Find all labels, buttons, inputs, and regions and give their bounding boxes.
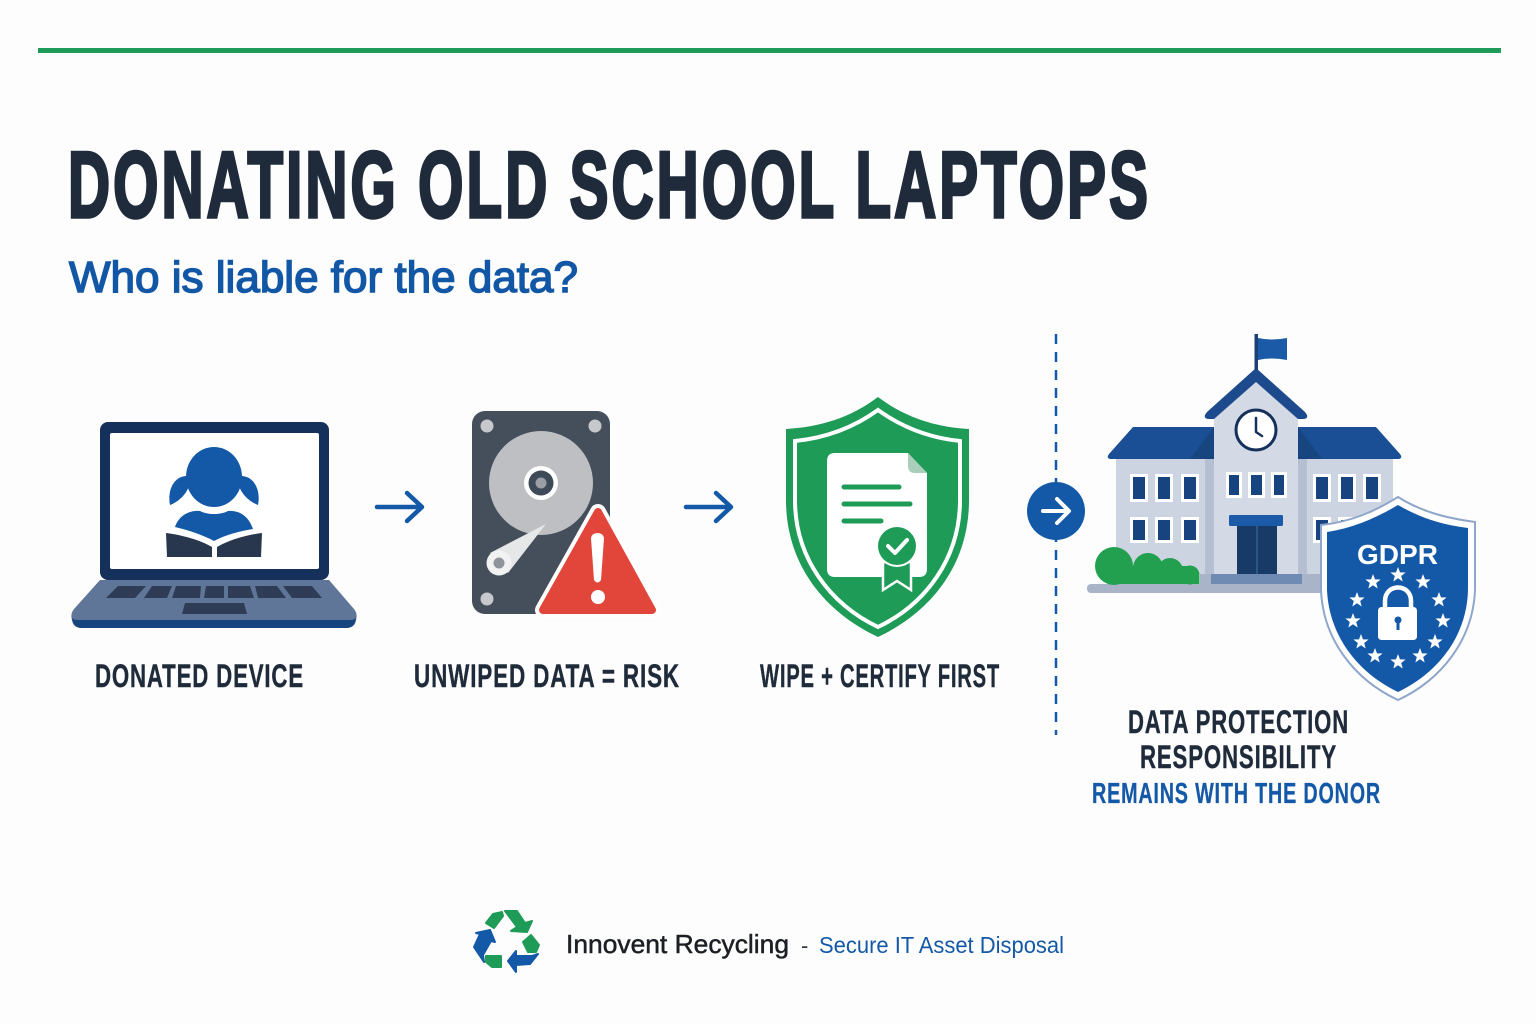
arrow: device to data: [377, 493, 422, 521]
label: wipe and certify: WIPE + CERTIFY FIRST: [760, 658, 1000, 694]
label: unwiped data: UNWIPED DATA = RISK: [414, 658, 680, 694]
divider with arrow: [1027, 334, 1085, 735]
icon: recycling logo: [474, 911, 539, 972]
label: data protection responsibility: RESPONSIBILITY: [1140, 739, 1337, 775]
panel: unwiped data: [414, 411, 680, 694]
panel: wipe and certify: [760, 397, 1000, 694]
arrow: data to wipe: [686, 493, 731, 521]
text: tagline: Secure IT Asset Disposal: [819, 932, 1064, 958]
icon: circle arrow: [1027, 482, 1085, 540]
label: donated device: DONATED DEVICE: [95, 658, 304, 694]
icon: warning triangle: [543, 512, 652, 610]
icon: flag: [1254, 334, 1287, 370]
label: data protection responsibility: [1092, 704, 1381, 810]
label: data protection responsibility: REMAINS WITH THE DONOR: [1092, 778, 1381, 810]
text: GDPR: GDPR: [1357, 539, 1438, 570]
subtitle: Who is liable for the data?: [69, 253, 578, 302]
icon: laptop: [71, 422, 357, 628]
footer: [474, 911, 1064, 972]
icon: green shield with certificate: [786, 397, 969, 637]
icon: hard drive: [472, 411, 610, 614]
icon: school building: [1087, 334, 1401, 593]
icon: bush: [1095, 547, 1200, 585]
label: data protection responsibility: DATA PROTECTION: [1128, 704, 1349, 740]
panel: data protection responsibility: [1087, 334, 1475, 810]
icon: GDPR shield: [1321, 497, 1475, 700]
icon: child reading: [166, 447, 262, 557]
text: company name: Innovent Recycling: [566, 929, 789, 959]
panel: donated device: [71, 422, 357, 694]
icon: padlock: [1378, 588, 1417, 640]
text: separator: -: [801, 933, 808, 958]
icon: clock: [1236, 410, 1276, 450]
